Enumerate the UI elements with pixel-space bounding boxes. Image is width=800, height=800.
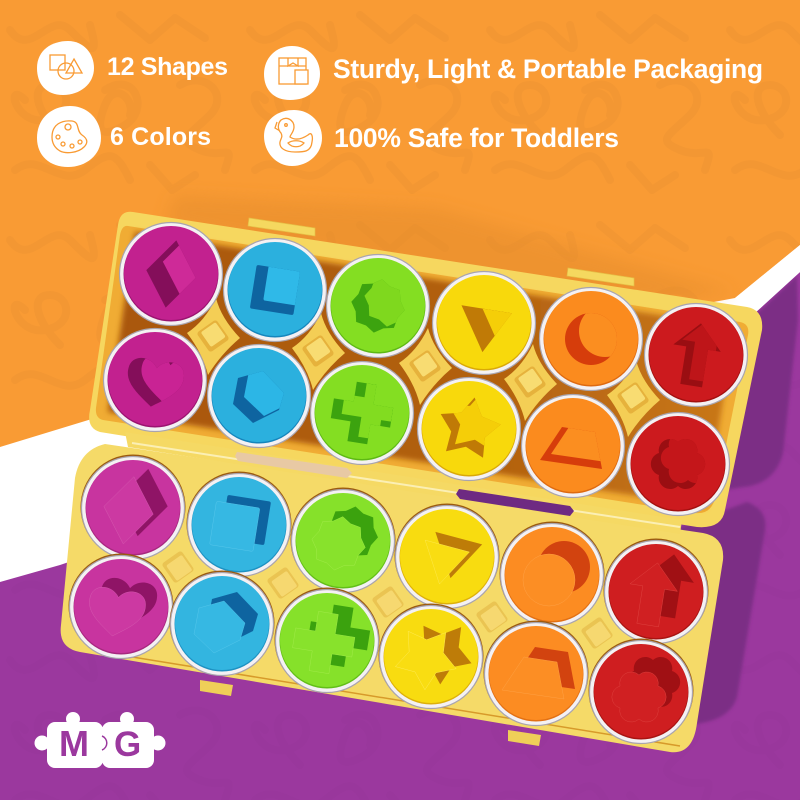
tray floor — [108, 232, 735, 507]
tray body — [61, 444, 723, 752]
lid: red flower raised — [588, 638, 694, 744]
icon: boxes — [264, 46, 320, 100]
lid: green gear raised — [290, 488, 396, 592]
tray shadow on orange — [165, 195, 735, 310]
feature: 6 Colors: 6 Colors — [110, 123, 211, 151]
tray body — [89, 212, 762, 527]
lid: green cross — [310, 362, 414, 464]
lid: blue hexagon — [208, 344, 310, 448]
background: purple panel — [0, 272, 800, 800]
feature: 100% safe — [264, 110, 619, 166]
logo: MG puzzle — [34, 712, 166, 768]
puzzle joint — [102, 736, 107, 750]
logo piece M — [34, 712, 103, 768]
hinge between trays — [125, 432, 682, 534]
lid: magenta diamond raised — [80, 454, 186, 560]
recessed squares — [161, 550, 614, 650]
lid: yellow triangle raised — [394, 504, 500, 608]
lid: red flower — [626, 412, 730, 516]
connector tabs — [187, 298, 660, 437]
tray cavity wall — [96, 226, 748, 513]
hinge slot: tan — [235, 452, 352, 478]
tray shadow on purple: lower — [680, 502, 765, 724]
feature: 12 Shapes — [37, 41, 228, 95]
lid: green cross raised — [274, 588, 380, 692]
feature: 12 Shapes: 12 Shapes — [107, 53, 228, 81]
icon: rubber duck — [264, 110, 322, 166]
upper tray — [89, 212, 762, 527]
lid: magenta diamond — [120, 222, 222, 326]
feature: Sturdy packaging: Sturdy, Light & Portable Packaging — [333, 54, 763, 84]
lid: orange circle raised — [500, 522, 604, 626]
lid: orange trapezoid — [522, 394, 624, 498]
rim line — [120, 655, 680, 746]
icon: shapes — [37, 41, 94, 95]
feature list — [37, 41, 763, 167]
lid: blue square raised — [186, 472, 292, 576]
lower tray lids — [68, 454, 708, 744]
lid: yellow triangle — [432, 272, 536, 374]
lid: red arrow raised — [604, 538, 708, 644]
lower tray — [61, 444, 723, 752]
lid: green gear — [326, 254, 430, 358]
feature: Sturdy packaging — [264, 46, 763, 100]
lid: magenta heart — [104, 328, 206, 432]
hinge slot: purple — [456, 489, 574, 516]
icon: palette — [37, 106, 101, 167]
tray shadow on purple: upper — [725, 276, 798, 490]
upper tray lids — [104, 222, 748, 516]
lid: magenta heart raised — [68, 554, 174, 658]
lid: blue hexagon raised — [170, 570, 274, 676]
bottom tabs — [200, 680, 541, 746]
logo piece G — [102, 712, 166, 768]
white band — [735, 245, 800, 313]
logo: MG puzzle: M — [59, 723, 89, 764]
logo: MG puzzle: G — [114, 725, 141, 764]
feature: 100% safe: 100% Safe for Toddlers — [334, 123, 619, 153]
lid: blue square — [224, 238, 326, 342]
lid: orange circle — [540, 288, 642, 390]
tray tabs — [248, 218, 634, 286]
lid: yellow star — [418, 378, 520, 480]
feature: 6 Colors — [37, 106, 211, 167]
lid: yellow star raised — [378, 604, 484, 708]
lid: red arrow — [644, 304, 748, 406]
lid: orange trapezoid raised — [484, 620, 588, 726]
hinge highlight — [132, 443, 680, 527]
